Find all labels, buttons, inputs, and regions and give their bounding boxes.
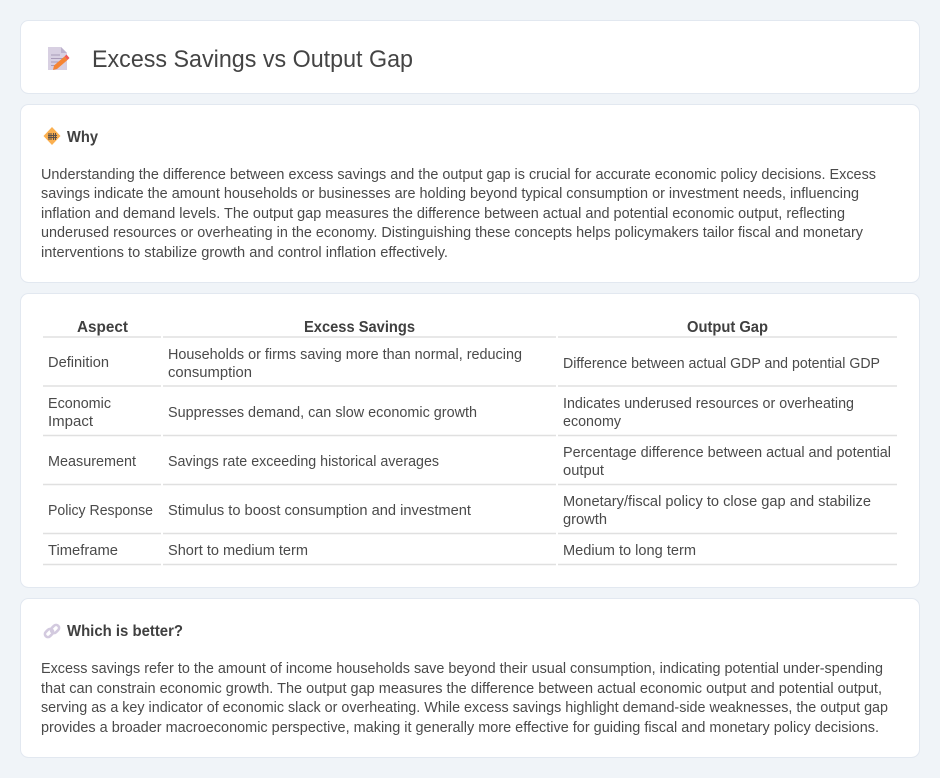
row: policy response: Policy Response <box>48 503 153 519</box>
icon: memo with pencil <box>48 47 70 70</box>
icon: link <box>44 624 60 638</box>
text block: which is better <box>41 661 888 736</box>
row: policy response <box>48 494 871 528</box>
row: timeframe: Medium to long term <box>563 543 696 559</box>
row: timeframe <box>48 543 696 559</box>
row: economic impact: Indicates underused resources or overheating <box>563 396 854 412</box>
text block: which is better: Excess savings refer to the amount of income households save beyond their usual consumption, indicating potential under-spending <box>41 661 883 677</box>
row: measurement: Savings rate exceeding historical averages <box>168 454 439 470</box>
table header row: Aspect <box>77 319 129 336</box>
row: measurement: Measurement <box>48 454 136 470</box>
row: policy response: Monetary/fiscal policy to close gap and stabilize <box>563 494 871 510</box>
text block: which is better: that can constrain economic growth. The output gap measures the difference between actual economic output and potential output, <box>41 681 882 697</box>
row: policy response: Stimulus to boost consumption and investment <box>168 503 471 519</box>
text block: why: interventions to stabilize growth and control inflation effectively. <box>41 245 448 261</box>
table header row: Excess Savings <box>304 319 415 336</box>
row: policy response: growth <box>563 512 607 528</box>
heading: why: Why <box>67 129 98 146</box>
panel: comparison table <box>20 294 920 588</box>
text block: why: underused resources or overheating in the economy. Distinguishing these concepts helps policymakers tailor fiscal and monetary <box>41 225 864 241</box>
text block: why: savings indicate the amount households or businesses are holding beyond typical consumption or investment needs, influencing <box>41 186 859 202</box>
heading: which is better: Which is better? <box>67 623 183 640</box>
table header row <box>77 319 768 336</box>
title: Excess Savings vs Output Gap <box>92 46 413 73</box>
text block: why: Understanding the difference between excess savings and the output gap is crucial for accurate economic policy decisions. Excess <box>41 167 876 183</box>
row: economic impact: Suppresses demand, can slow economic growth <box>168 405 477 421</box>
row: economic impact: Economic <box>48 396 111 412</box>
row: economic impact <box>48 396 854 430</box>
icon: diamond sign <box>44 127 60 145</box>
row: economic impact: Impact <box>48 414 93 430</box>
text block: why: inflation and demand levels. The output gap measures the difference between actual and potential economic output, reflecting <box>41 206 845 222</box>
row: timeframe: Timeframe <box>48 543 118 559</box>
row: economic impact: economy <box>563 414 622 430</box>
row: measurement: output <box>563 463 604 479</box>
row: measurement <box>48 445 891 479</box>
text block: which is better: provides a broader macroeconomic perspective, making it generally more effective for guiding fiscal and monetary policy decisions. <box>41 720 879 736</box>
row: definition: Definition <box>48 355 109 371</box>
table header row: Output Gap <box>687 319 768 336</box>
text block: which is better: serving as a key indicator of economic slack or overheating. While excess savings highlight demand-side weaknesses, the output gap <box>41 700 888 716</box>
row: definition <box>48 347 880 381</box>
panel: which is better <box>20 598 920 758</box>
row: timeframe: Short to medium term <box>168 543 308 559</box>
panel: header <box>20 20 920 94</box>
row: definition: Households or firms saving more than normal, reducing <box>168 347 522 363</box>
row: measurement: Percentage difference between actual and potential <box>563 445 891 461</box>
text block: why <box>41 167 876 261</box>
row: definition: consumption <box>168 365 252 381</box>
panel: why <box>20 104 920 282</box>
row: definition: Difference between actual GDP and potential GDP <box>563 356 880 372</box>
